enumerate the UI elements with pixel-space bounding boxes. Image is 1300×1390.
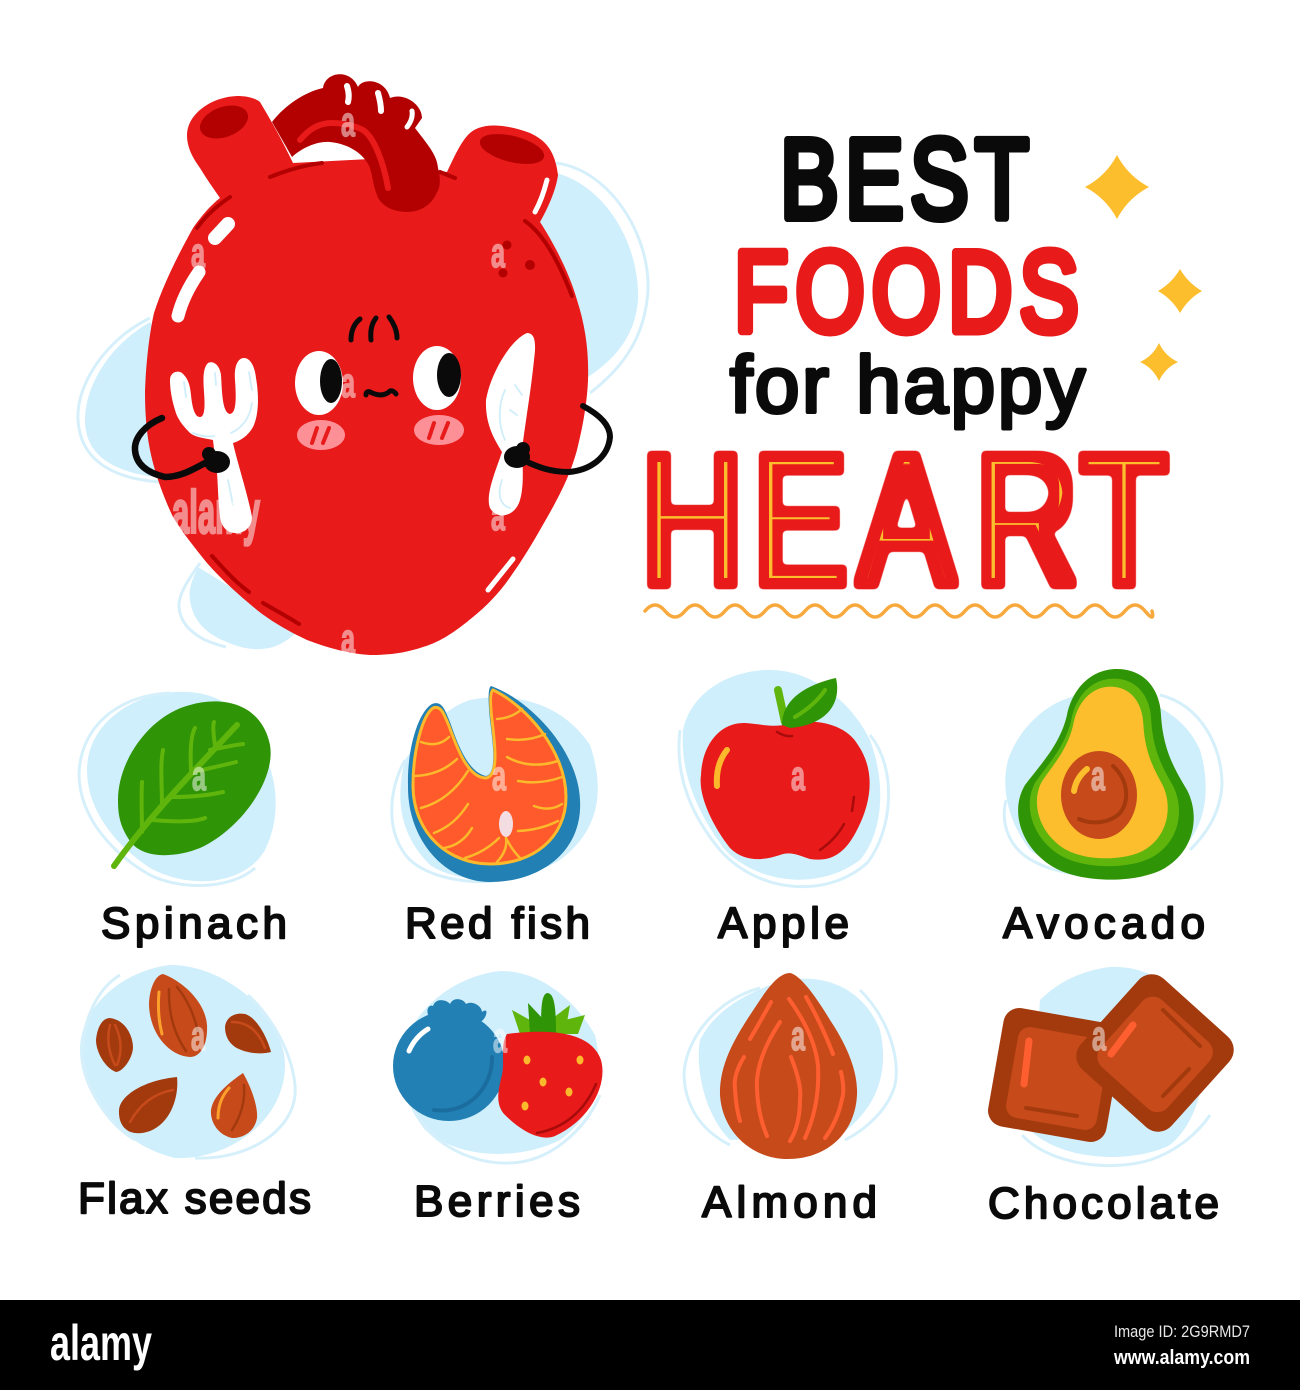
watermarks: a xyxy=(493,1014,507,1061)
footer url: www.alamy.com xyxy=(1113,1347,1250,1369)
watermarks: a xyxy=(341,359,355,406)
watermarks: a xyxy=(491,492,505,539)
vessel openings xyxy=(195,99,547,170)
label: spinach: Spinach xyxy=(101,899,287,948)
food: apple xyxy=(679,670,889,948)
white highlights xyxy=(178,180,547,590)
footer logo: alamy xyxy=(50,1315,152,1371)
brows xyxy=(351,317,397,340)
label: avocado: Avocado xyxy=(1003,899,1205,948)
watermarks: a xyxy=(192,752,206,799)
eyes xyxy=(295,346,461,415)
heart body xyxy=(145,96,588,655)
dark contour lines xyxy=(197,163,572,624)
watermarks: a xyxy=(491,229,505,276)
cheeks xyxy=(297,415,464,450)
sparkles xyxy=(1085,155,1202,381)
watermarks: a xyxy=(1091,752,1105,799)
food: spinach xyxy=(79,692,287,948)
label: berries: Berries xyxy=(414,1177,580,1226)
watermarks: a xyxy=(1092,1012,1106,1059)
label: flax seeds: Flax seeds xyxy=(78,1174,311,1223)
icon: flax seed left xyxy=(96,1018,133,1072)
icon: chocolate square left xyxy=(985,1005,1125,1145)
watermarks: a xyxy=(492,752,506,799)
watermarks xyxy=(172,98,1106,1061)
food: red fish xyxy=(392,686,598,948)
left arm and hand xyxy=(135,418,230,477)
fork xyxy=(170,358,258,533)
food: chocolate xyxy=(985,967,1241,1228)
heart character xyxy=(135,74,610,655)
watermarks: a xyxy=(341,98,355,145)
food: flax seeds xyxy=(78,965,311,1223)
icon: avocado xyxy=(1018,669,1194,880)
icon: strawberry xyxy=(498,993,602,1138)
watermarks: a xyxy=(341,615,355,662)
icon: almond xyxy=(720,973,857,1159)
food: avocado xyxy=(1003,669,1222,948)
right arm and hand xyxy=(504,406,610,472)
watermarks: a xyxy=(191,229,205,276)
food: almond xyxy=(684,973,896,1227)
icon: flax seed lower left xyxy=(119,1077,177,1133)
label: red fish: Red fish xyxy=(405,899,590,948)
watermarks: a xyxy=(191,1012,205,1059)
label: chocolate: Chocolate xyxy=(988,1179,1219,1228)
wavy underline xyxy=(645,605,1153,617)
title line: for happy: for happy xyxy=(730,340,1085,429)
label: apple: Apple xyxy=(718,899,849,948)
heart background blobs xyxy=(78,163,648,649)
footer bar xyxy=(0,1300,1300,1390)
icon: apple xyxy=(701,678,870,860)
watermarks: a xyxy=(791,1012,805,1059)
title line: heart: HEART xyxy=(641,417,1168,624)
icon: blueberry xyxy=(393,999,505,1121)
icon: flax seed lower right xyxy=(211,1073,257,1138)
aortic arch xyxy=(272,74,440,212)
knife xyxy=(486,333,535,515)
icon: flax seed large xyxy=(149,974,207,1057)
label: almond: Almond xyxy=(702,1178,877,1227)
mouth xyxy=(366,391,396,395)
icon: chocolate square right xyxy=(1069,967,1241,1139)
icon: salmon steak xyxy=(408,686,580,882)
title line: foods: FOODS xyxy=(734,227,1079,356)
watermarks: alamy xyxy=(172,479,260,546)
title line: best: BEST xyxy=(780,117,1029,243)
face xyxy=(295,317,464,450)
watermarks: a xyxy=(791,752,805,799)
footer image id: Image ID: 2G9RMD7 xyxy=(1114,1322,1250,1341)
food: berries xyxy=(393,971,602,1226)
title xyxy=(641,117,1168,624)
icon: spinach leaf xyxy=(114,701,271,866)
icon: flax seed right xyxy=(225,1014,271,1053)
